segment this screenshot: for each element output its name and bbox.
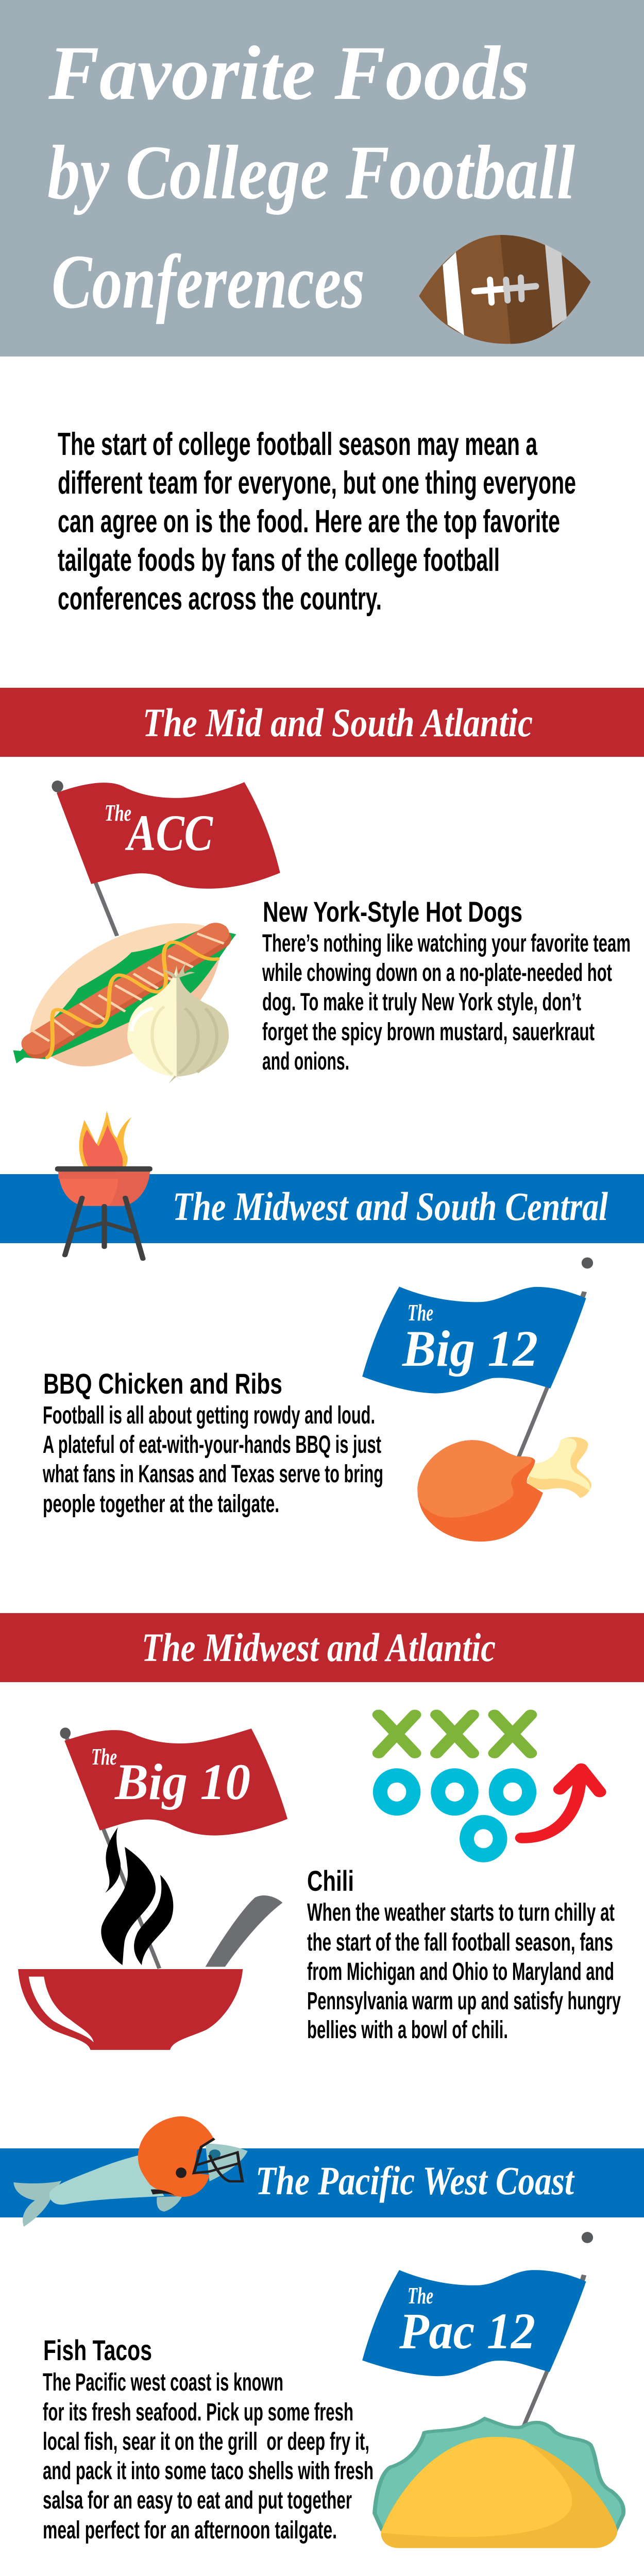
text: Chili: bellies with a bowl of chili. xyxy=(307,2016,508,2044)
intro text: conferences across the country. xyxy=(58,581,382,617)
icon: football xyxy=(419,235,590,344)
section banner: Midwest and Atlantic: The Midwest and Atlantic xyxy=(142,1625,496,1670)
flag: the ACC: The xyxy=(105,800,131,826)
text: Fish Tacos: Fish Tacos xyxy=(43,2334,152,2366)
intro text xyxy=(58,427,576,617)
section banner: Midwest and Atlantic xyxy=(0,1613,644,1682)
icon: football play diagram xyxy=(373,1715,600,1862)
text: Fish Tacos: The Pacific west coast is known xyxy=(43,2369,283,2396)
flag: the Big 10: Big 10 xyxy=(114,1753,250,1810)
text: BBQ Chicken and Ribs xyxy=(42,1367,383,1518)
text: Chili xyxy=(307,1865,621,2044)
flag: the Pac 12: The xyxy=(408,2282,433,2309)
panel: the Pac 12 xyxy=(0,2116,644,2548)
panel: the Big 12 xyxy=(0,1111,644,1541)
section banner: Midwest and South Central xyxy=(0,1174,644,1243)
icon: hot dog and onion xyxy=(13,923,236,1084)
flag: the Big 10 xyxy=(60,1727,287,1969)
section banner: Mid and South Atlantic xyxy=(0,688,644,757)
text: BBQ Chicken and Ribs: Football is all about getting rowdy and loud. xyxy=(43,1402,375,1429)
icon: steaming bowl of chili xyxy=(18,1827,282,2050)
title: Conferences xyxy=(52,239,365,325)
text: Fish Tacos: for its fresh seafood. Pick up some fresh xyxy=(43,2399,353,2426)
flag: the Big 12: The xyxy=(408,1299,433,1326)
text: BBQ Chicken and Ribs: people together at the tailgate. xyxy=(43,1490,279,1518)
text: New York-Style Hot Dogs: and onions. xyxy=(262,1048,349,1075)
text: Fish Tacos: meal perfect for an afternoon tailgate. xyxy=(43,2517,337,2544)
icon: chicken drumstick xyxy=(417,1437,591,1541)
text: Fish Tacos: salsa for an easy to eat and put together xyxy=(43,2487,352,2514)
title: Favorite Foods xyxy=(48,30,530,116)
icon: taco xyxy=(375,2418,623,2548)
panel: the Big 10 xyxy=(0,1613,644,2050)
flag: the Big 12: Big 12 xyxy=(402,1320,538,1377)
flag: the Pac 12: Pac 12 xyxy=(399,2302,535,2360)
text: BBQ Chicken and Ribs: A plateful of eat-with-your-hands BBQ is just xyxy=(43,1431,381,1459)
icon: grill xyxy=(55,1111,152,1259)
panel: the ACC xyxy=(0,688,644,1084)
flag: the ACC: ACC xyxy=(125,804,213,861)
section banner: Pacific West Coast xyxy=(0,2148,644,2217)
section banner: Pacific West Coast: The Pacific West Coast xyxy=(256,2158,575,2203)
flag: the Big 12 xyxy=(362,1258,593,1458)
flag: the Pac 12 xyxy=(362,2232,593,2426)
panel: header xyxy=(0,0,644,357)
section banner: Mid and South Atlantic: The Mid and South Atlantic xyxy=(143,700,533,745)
flag: the ACC xyxy=(52,781,280,936)
text: Chili: Chili xyxy=(307,1865,354,1897)
text: BBQ Chicken and Ribs: BBQ Chicken and Ribs xyxy=(43,1367,282,1400)
text: Fish Tacos xyxy=(43,2334,374,2544)
icon: fish in helmet xyxy=(13,2116,248,2227)
title xyxy=(47,30,575,325)
text: New York-Style Hot Dogs xyxy=(262,895,631,1075)
text: New York-Style Hot Dogs: New York-Style Hot Dogs xyxy=(263,895,522,928)
text: Fish Tacos: and pack it into some taco shells with fresh xyxy=(43,2458,374,2485)
text: BBQ Chicken and Ribs: what fans in Kansas and Texas serve to bring xyxy=(42,1461,383,1488)
flag: the Big 10: The xyxy=(91,1743,117,1770)
text: Fish Tacos: local fish, sear it on the grill or deep fry it, xyxy=(43,2428,369,2455)
